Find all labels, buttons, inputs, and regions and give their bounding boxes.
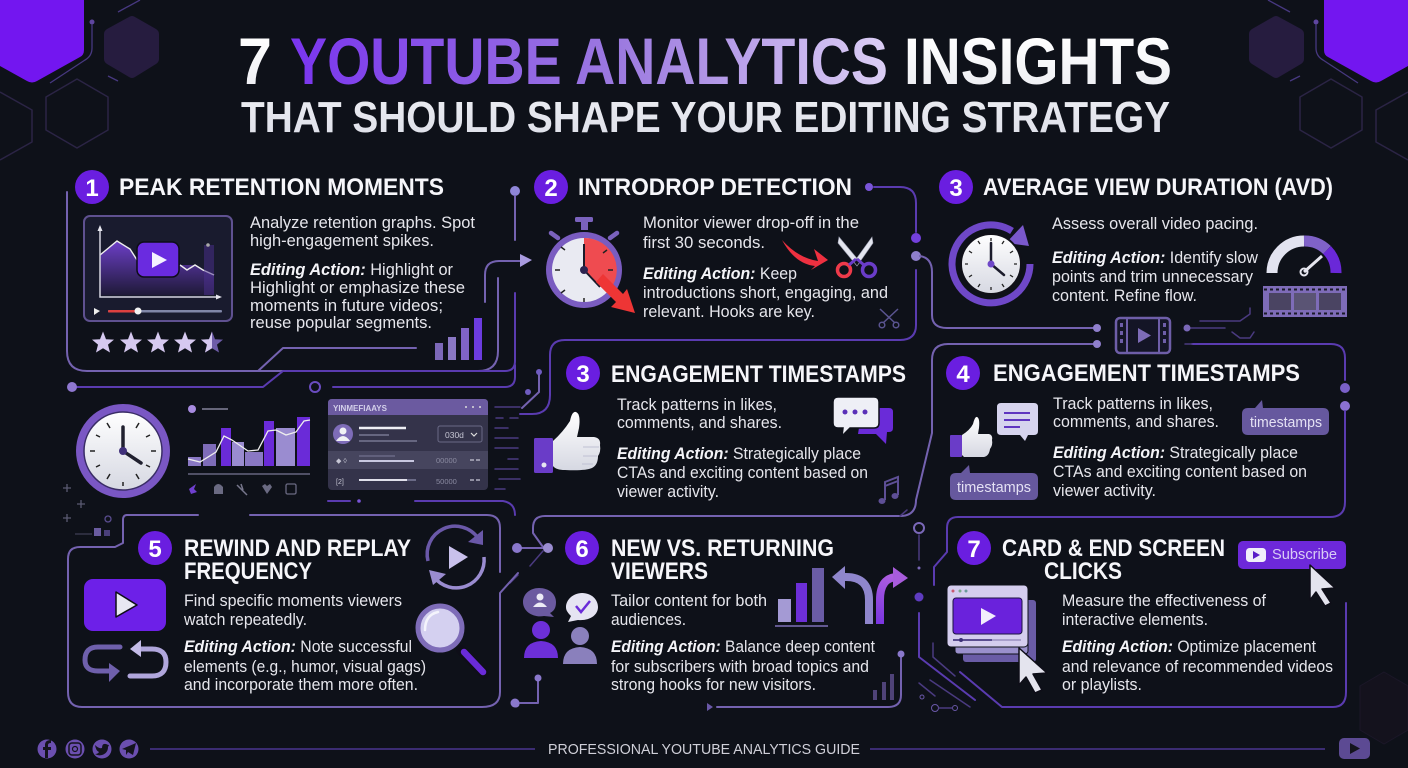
body text 2: Monitor viewer drop-off in the: [643, 214, 859, 232]
body text 4: comments, and shares.: [1053, 413, 1219, 431]
badge 3: [939, 170, 973, 204]
footer lines: [150, 748, 1325, 750]
heading 5: REWIND AND REPLAY: [184, 535, 411, 562]
tag: timestamps left: timestamps: [957, 479, 1031, 496]
icon: thumbs up: [534, 412, 600, 473]
body text 3b: viewer activity.: [617, 483, 719, 501]
badge 1: [75, 170, 109, 204]
badge 7: 7: [967, 536, 981, 563]
hexagon decoration: top right: [1249, 0, 1408, 160]
heading 3b: ENGAGEMENT TIMESTAMPS: [611, 361, 906, 388]
body text 3: [1052, 215, 1258, 305]
icons: plus signs: [63, 484, 111, 536]
arrow: red pointing to scissors: [782, 240, 828, 270]
icon: stopwatch: [546, 217, 635, 313]
icon: star rating: [92, 332, 223, 352]
badge 4: [946, 356, 980, 390]
title: YOUTUBE ANALYTICS: [290, 24, 888, 98]
icon: message bubble: [997, 403, 1038, 441]
icons: social: [38, 740, 138, 758]
body text 4: Track patterns in likes,: [1053, 395, 1213, 413]
panel 6: new vs returning viewers: [523, 531, 908, 694]
body text 7: and relevance of recommended videos: [1062, 658, 1333, 676]
body text 4: Editing Action: Strategically place: [1053, 444, 1298, 462]
icon: clock with arrow: [952, 225, 1030, 303]
body text 1: moments in future videos;: [250, 297, 443, 315]
body text 3b: Editing Action: Strategically place: [617, 445, 861, 463]
panel 3: average view duration: [939, 170, 1347, 353]
heading 6: NEW VS. RETURNING: [611, 535, 834, 562]
icon: cursor on subscribe: [1310, 565, 1335, 606]
panel 4: engagement timestamps: [946, 356, 1329, 500]
title: THAT SHOULD SHAPE YOUR EDITING STRATEGY: [241, 93, 1170, 142]
body text 3: Editing Action: Identify slow: [1052, 249, 1258, 267]
title: [238, 24, 1172, 142]
icon: wall clock: [76, 404, 170, 498]
body text 1: Analyze retention graphs. Spot: [250, 214, 475, 232]
icon: video frame: [1116, 318, 1170, 353]
heading 4: ENGAGEMENT TIMESTAMPS: [993, 360, 1300, 387]
body text 4: [1053, 395, 1307, 500]
heading 1: PEAK RETENTION MOMENTS: [119, 174, 444, 201]
heading 7: CLICKS: [1044, 558, 1122, 585]
badge 2: 2: [544, 175, 558, 202]
body text 2: relevant. Hooks are key.: [643, 303, 815, 321]
body text 1: reuse popular segments.: [250, 314, 432, 332]
panel 3b: engagement timestamps: [534, 356, 906, 504]
panel: dashboard table: [328, 399, 488, 490]
panel 7: card and end screen clicks: [947, 531, 1346, 694]
chart: retention graph: [84, 216, 232, 321]
body text 1: high-engagement spikes.: [250, 232, 434, 250]
heading 6: VIEWERS: [611, 558, 708, 585]
panel: dashboard table: 50000: [436, 477, 457, 486]
body text 5: Editing Action: Note successful: [184, 638, 412, 656]
icon: youtube: [1339, 738, 1370, 759]
heading 5: [184, 535, 411, 585]
icon: music note: [878, 477, 898, 504]
body text 6: for subscribers with broad topics and: [611, 658, 869, 676]
body text 1: Editing Action: Highlight or: [250, 261, 453, 279]
badge 6: 6: [575, 536, 589, 563]
icon: cursor on card: [1019, 648, 1047, 693]
icon: small scissors: [879, 309, 899, 328]
tag: timestamps left: [950, 465, 1038, 500]
chart: bar and line: [188, 405, 310, 474]
body text 1: [250, 214, 475, 332]
heading 6: [611, 535, 834, 585]
badge 3b: 3: [576, 361, 590, 388]
badge 7: [957, 531, 991, 565]
arrow: fork paths: [832, 566, 908, 624]
title: 7: [238, 24, 272, 98]
icon: video cards: [947, 585, 1036, 662]
body text 3: Assess overall video pacing.: [1052, 215, 1258, 233]
title: INSIGHTS: [904, 24, 1172, 98]
body text 7: or playlists.: [1062, 676, 1142, 694]
badge 1: 1: [85, 175, 99, 202]
hexagon decoration: top left: [0, 0, 159, 160]
icon: chat bubbles: [833, 397, 893, 444]
panel 1: peak retention moments: [75, 170, 482, 360]
panel 2: intro drop detection: [534, 170, 899, 328]
body text 7: [1062, 592, 1333, 694]
body text 6: [611, 592, 875, 694]
tag: timestamps right: timestamps: [1250, 414, 1322, 431]
tag: timestamps right: [1242, 400, 1329, 435]
badge 3: 3: [949, 175, 963, 202]
body text 4: CTAs and exciting content based on: [1053, 463, 1307, 481]
body text 2: Editing Action: Keep: [643, 265, 797, 283]
body text 2: introductions short, engaging, and: [643, 284, 888, 302]
icon: viewers: [523, 588, 598, 664]
badge 4: 4: [956, 361, 970, 388]
button: subscribe: Subscribe: [1272, 546, 1337, 563]
icon: speed gauge: [1272, 241, 1336, 276]
body text 5: watch repeatedly.: [183, 611, 307, 629]
body text 2: first 30 seconds.: [643, 234, 765, 252]
heading 7: CARD & END SCREEN: [1002, 535, 1225, 562]
icon: small thumbs up: [950, 417, 992, 457]
icon: magnifying glass: [418, 606, 484, 674]
icon: play button: [84, 579, 166, 631]
badge 6: [565, 531, 599, 565]
icon: growth bars: [775, 568, 828, 626]
body text 3b: [617, 396, 868, 501]
body text 5: Find specific moments viewers: [184, 592, 402, 610]
badge 5: [138, 531, 172, 565]
icon: replay circle: [427, 526, 484, 588]
panel: dashboard table: ◆ ◊: [336, 458, 347, 465]
hexagon decoration: bottom right: [1360, 672, 1408, 744]
body text 6: strong hooks for new visitors.: [611, 676, 816, 694]
body text 3b: CTAs and exciting content based on: [617, 464, 868, 482]
body text 5: [183, 592, 426, 694]
badge 3b: [566, 356, 600, 390]
body text 6: Editing Action: Balance deep content: [611, 638, 875, 656]
panel: dashboard table: [2]: [336, 479, 344, 486]
body text 7: Editing Action: Optimize placement: [1062, 638, 1316, 656]
body text 3b: Track patterns in likes,: [617, 396, 777, 414]
heading 5: FREQUENCY: [184, 558, 312, 585]
center-left dashboard illustration: [63, 399, 488, 536]
icons: chart toolbar: [189, 484, 296, 495]
footer text: PROFESSIONAL YOUTUBE ANALYTICS GUIDE: [548, 742, 860, 758]
body text 3: points and trim unnecessary: [1052, 268, 1254, 286]
body text 4: viewer activity.: [1053, 482, 1156, 500]
panel: dashboard table: 00000: [436, 456, 457, 465]
body text 5: and incorporate them more often.: [184, 676, 418, 694]
body text 7: Measure the effectiveness of: [1062, 592, 1266, 610]
body text 6: Tailor content for both: [611, 592, 767, 610]
heading 2: INTRODROP DETECTION: [578, 174, 852, 201]
badge 2: [534, 170, 568, 204]
body text 1: Highlight or emphasize these: [250, 279, 465, 297]
button: subscribe: [1238, 541, 1346, 569]
panel: dashboard table: YINMEFIAAYS: [333, 404, 388, 413]
icon: scissors: [838, 237, 876, 276]
body text 3: content. Refine flow.: [1052, 287, 1197, 305]
icon: film strip: [1263, 286, 1347, 317]
circuit connectors and panel borders: [67, 183, 1350, 712]
body text 2: [643, 214, 888, 321]
body text 5: elements (e.g., humor, visual gags): [184, 658, 426, 676]
icon: small bars: [435, 318, 482, 360]
body text 6: audiences.: [611, 611, 686, 629]
panel: dashboard table: 030d: [445, 430, 464, 440]
body text 3b: comments, and shares.: [617, 414, 782, 432]
heading 7: [1002, 535, 1225, 585]
panel 5: rewind and replay frequency: [84, 526, 484, 694]
footer: [38, 738, 1370, 759]
heading 3: AVERAGE VIEW DURATION (AVD): [983, 174, 1333, 201]
badge 5: 5: [148, 536, 162, 563]
body text 7: interactive elements.: [1062, 611, 1208, 629]
icon: loop arrows: [85, 640, 166, 682]
